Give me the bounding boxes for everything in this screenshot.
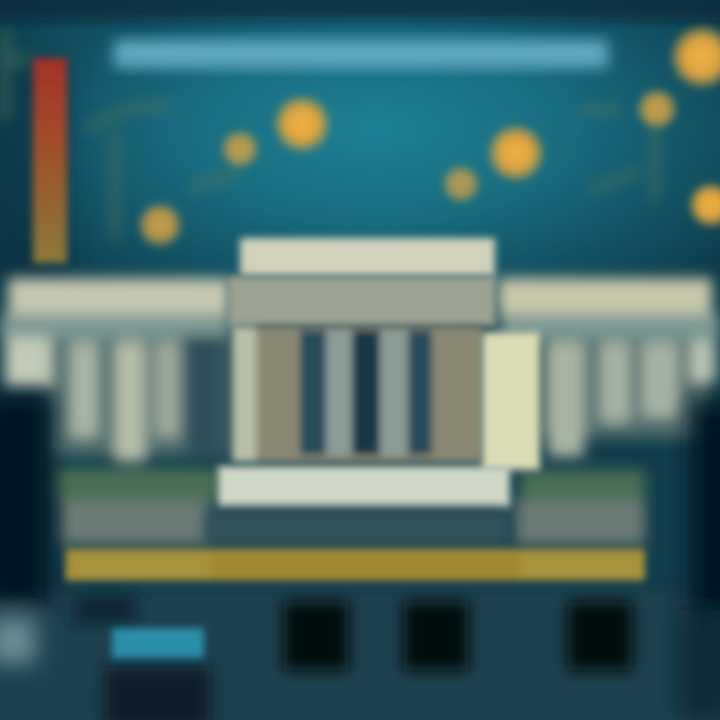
plinth bbox=[205, 510, 510, 546]
dark side shapes bbox=[0, 395, 720, 720]
steps bbox=[218, 466, 510, 508]
roof bbox=[240, 238, 495, 276]
title bbox=[114, 40, 608, 68]
building: left wing bbox=[0, 278, 230, 462]
faint chart lines bbox=[5, 30, 655, 240]
black boxes bbox=[75, 595, 632, 720]
bottom panel bbox=[0, 395, 720, 720]
icon: gold coins bbox=[138, 26, 720, 247]
building: right wing bbox=[498, 278, 720, 457]
entablature bbox=[228, 276, 496, 326]
building: central block bbox=[205, 238, 540, 546]
columns bbox=[232, 326, 482, 462]
light pillar bbox=[482, 332, 540, 470]
cyan button bbox=[112, 628, 204, 658]
lawn and fence bbox=[55, 468, 645, 545]
gold banner bar bbox=[65, 549, 645, 581]
bar chart: red and orange bar bbox=[33, 58, 67, 263]
